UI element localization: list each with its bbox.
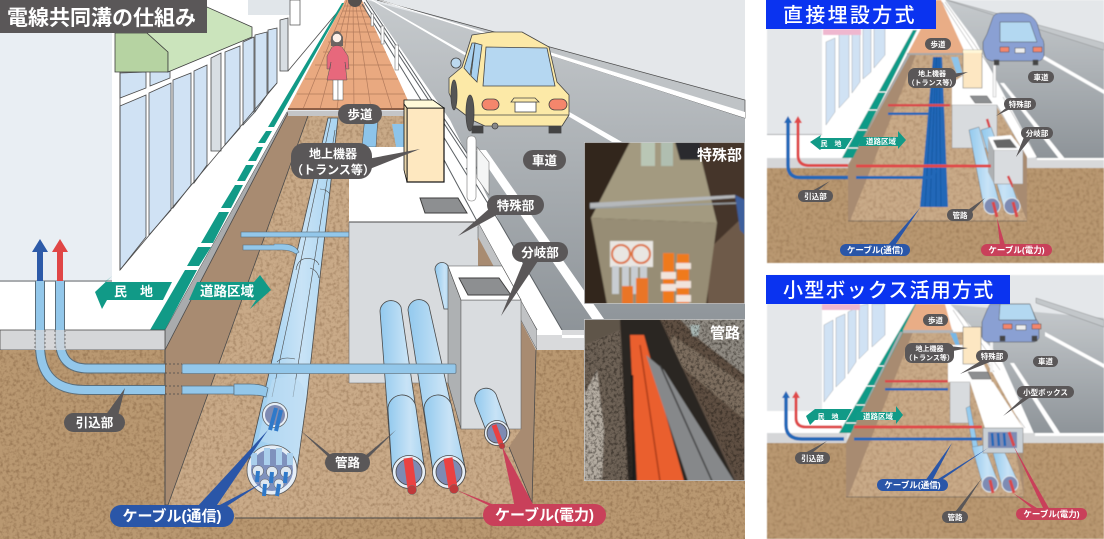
label: sidewalk	[923, 314, 948, 326]
label: private land: 民 地	[818, 412, 838, 421]
label: roadway	[523, 150, 566, 170]
label: conduit	[300, 430, 396, 472]
label: special section	[996, 98, 1036, 116]
label: telecom cable	[877, 443, 988, 491]
label: power cable	[981, 218, 1052, 256]
title: small box: 小型ボックス活用方式	[783, 279, 994, 302]
sidewalk tiles	[288, 0, 412, 110]
label: transformer: （トランス等）	[908, 78, 956, 87]
label: small box: 小型ボックス	[1023, 387, 1068, 397]
shop awning	[115, 7, 252, 72]
label: power cable	[1013, 445, 1087, 520]
teal boundary strip	[150, 3, 344, 330]
road surface	[367, 0, 745, 335]
branch box	[448, 266, 521, 429]
lower conduit end with cables	[247, 445, 297, 496]
label: road zone	[859, 131, 906, 149]
label: conduit	[947, 198, 985, 221]
label: special section: 特殊部	[1009, 99, 1032, 109]
label: transformer	[905, 343, 968, 363]
label: conduit: 管路	[335, 455, 360, 470]
trench left wall	[165, 113, 309, 505]
label: transformer: 地上機器	[918, 69, 946, 78]
cable ends	[408, 443, 505, 494]
label: transformer: 地上機器	[309, 146, 357, 161]
transformer box	[404, 100, 444, 182]
panel: small box method	[766, 275, 1104, 539]
label: telecom cable	[110, 430, 268, 527]
panel: direct burial method	[766, 0, 1104, 263]
inset photo label 特殊部: 特殊部	[697, 146, 742, 164]
label: power cable	[454, 446, 606, 526]
arrow: private land	[95, 276, 172, 309]
label: special section: 特殊部	[981, 351, 1004, 361]
wall outline	[120, 3, 345, 270]
upper conduit end	[262, 402, 288, 431]
special box	[349, 147, 478, 383]
label: special section: 特殊部	[497, 198, 535, 213]
label: special section	[960, 350, 1008, 374]
upper crossing pipe	[182, 364, 456, 374]
panel: main cutaway diagram	[0, 0, 745, 539]
sleeve of main pipe	[258, 378, 305, 454]
label: conduit: 管路	[948, 512, 963, 522]
label: power cable: ケーブル(電力)	[988, 245, 1045, 255]
curb section	[537, 330, 584, 350]
label: roadway	[1028, 71, 1054, 83]
small power pipe in front	[475, 388, 510, 446]
label: power cable: ケーブル(電力)	[1023, 509, 1080, 519]
label: roadway: 車道	[532, 153, 557, 168]
yellow car	[449, 32, 569, 133]
left building wall	[0, 33, 112, 281]
label: power cable: ケーブル(電力)	[495, 506, 594, 524]
label: transformer: 地上機器	[916, 344, 944, 353]
far buildings	[248, 0, 300, 25]
diagram: small box	[767, 275, 1104, 539]
label: lead-in section: 引込部	[804, 191, 827, 201]
trench right wall	[478, 222, 537, 503]
label: private land	[806, 409, 852, 425]
title: direct burial	[766, 0, 936, 29]
label: telecom cable	[840, 208, 920, 256]
label: private land: 民 地	[820, 139, 842, 148]
trench floor	[168, 115, 536, 518]
label: road zone: 道路区域	[866, 136, 896, 146]
label: telecom cable: ケーブル(通信)	[122, 507, 222, 525]
lane lines	[371, 0, 745, 319]
arrow: road zone: 道路区域	[200, 283, 254, 299]
lower crossing pipe	[182, 384, 268, 397]
label: branch section	[1016, 127, 1053, 157]
label: telecom cable: ケーブル(通信)	[884, 480, 941, 490]
label: small box	[1003, 386, 1074, 416]
label: roadway	[1033, 356, 1058, 367]
label: transformer: （トランス等）	[291, 162, 375, 177]
background sky	[0, 0, 745, 350]
back wall band	[288, 111, 412, 116]
gray curb strip	[165, 112, 291, 350]
label: branch section	[501, 242, 568, 316]
label: sidewalk: 歩道	[928, 315, 943, 325]
arrow: private land: 民 地	[114, 284, 153, 299]
ground soil	[0, 350, 745, 539]
label: special section	[458, 195, 544, 236]
label: road zone: 道路区域	[863, 411, 893, 421]
small pipes behind back	[362, 116, 404, 147]
title: small box	[766, 275, 1010, 304]
title	[0, 0, 207, 33]
inset photo: special section	[584, 142, 745, 304]
label: sidewalk	[338, 104, 382, 124]
private land white ground	[0, 0, 345, 330]
label: branch section: 分岐部	[521, 245, 559, 260]
label: transformer: （トランス等）	[905, 353, 954, 362]
inset photo label 管路: 管路	[710, 324, 740, 342]
guard rail and curb	[362, 0, 562, 330]
power pipes	[380, 262, 466, 488]
title: direct burial: 直接埋設方式	[783, 4, 917, 27]
label: transformer	[908, 68, 968, 88]
road far shoulder	[377, 0, 745, 118]
label: lead-in section: 引込部	[76, 415, 114, 430]
label: lead-in section	[64, 388, 125, 432]
lead-in pipes	[35, 281, 182, 394]
label: private land	[810, 135, 852, 150]
title: 電線共同溝の仕組み	[7, 7, 196, 30]
main communication pipe	[247, 118, 338, 470]
label: telecom cable: ケーブル(通信)	[847, 245, 903, 255]
vanishing point dark	[348, 0, 362, 7]
label: sidewalk	[925, 38, 951, 50]
trench floor edge	[165, 350, 484, 518]
label: sidewalk: 歩道	[930, 39, 946, 49]
arrow: utility lines up	[32, 239, 68, 281]
inset photo: conduit trench	[584, 319, 745, 481]
label: road zone	[855, 406, 903, 424]
back lateral pipes	[241, 232, 349, 254]
label: conduit	[942, 478, 982, 523]
diagram: direct burial	[767, 0, 1104, 263]
label: lead-in section	[795, 441, 830, 464]
label: transformer	[291, 143, 420, 179]
label: roadway: 車道	[1038, 356, 1054, 366]
woman pedestrian	[327, 31, 349, 100]
red power cables	[408, 425, 501, 488]
label: branch section: 分岐部	[1026, 128, 1049, 138]
label: lead-in section: 引込部	[801, 453, 824, 463]
label: roadway: 車道	[1034, 72, 1049, 82]
label: conduit: 管路	[952, 210, 968, 220]
pavement section	[0, 330, 165, 350]
arrow: road zone	[189, 275, 271, 309]
building windows	[120, 18, 288, 270]
label: sidewalk: 歩道	[347, 107, 373, 122]
label: lead-in section	[798, 181, 833, 202]
